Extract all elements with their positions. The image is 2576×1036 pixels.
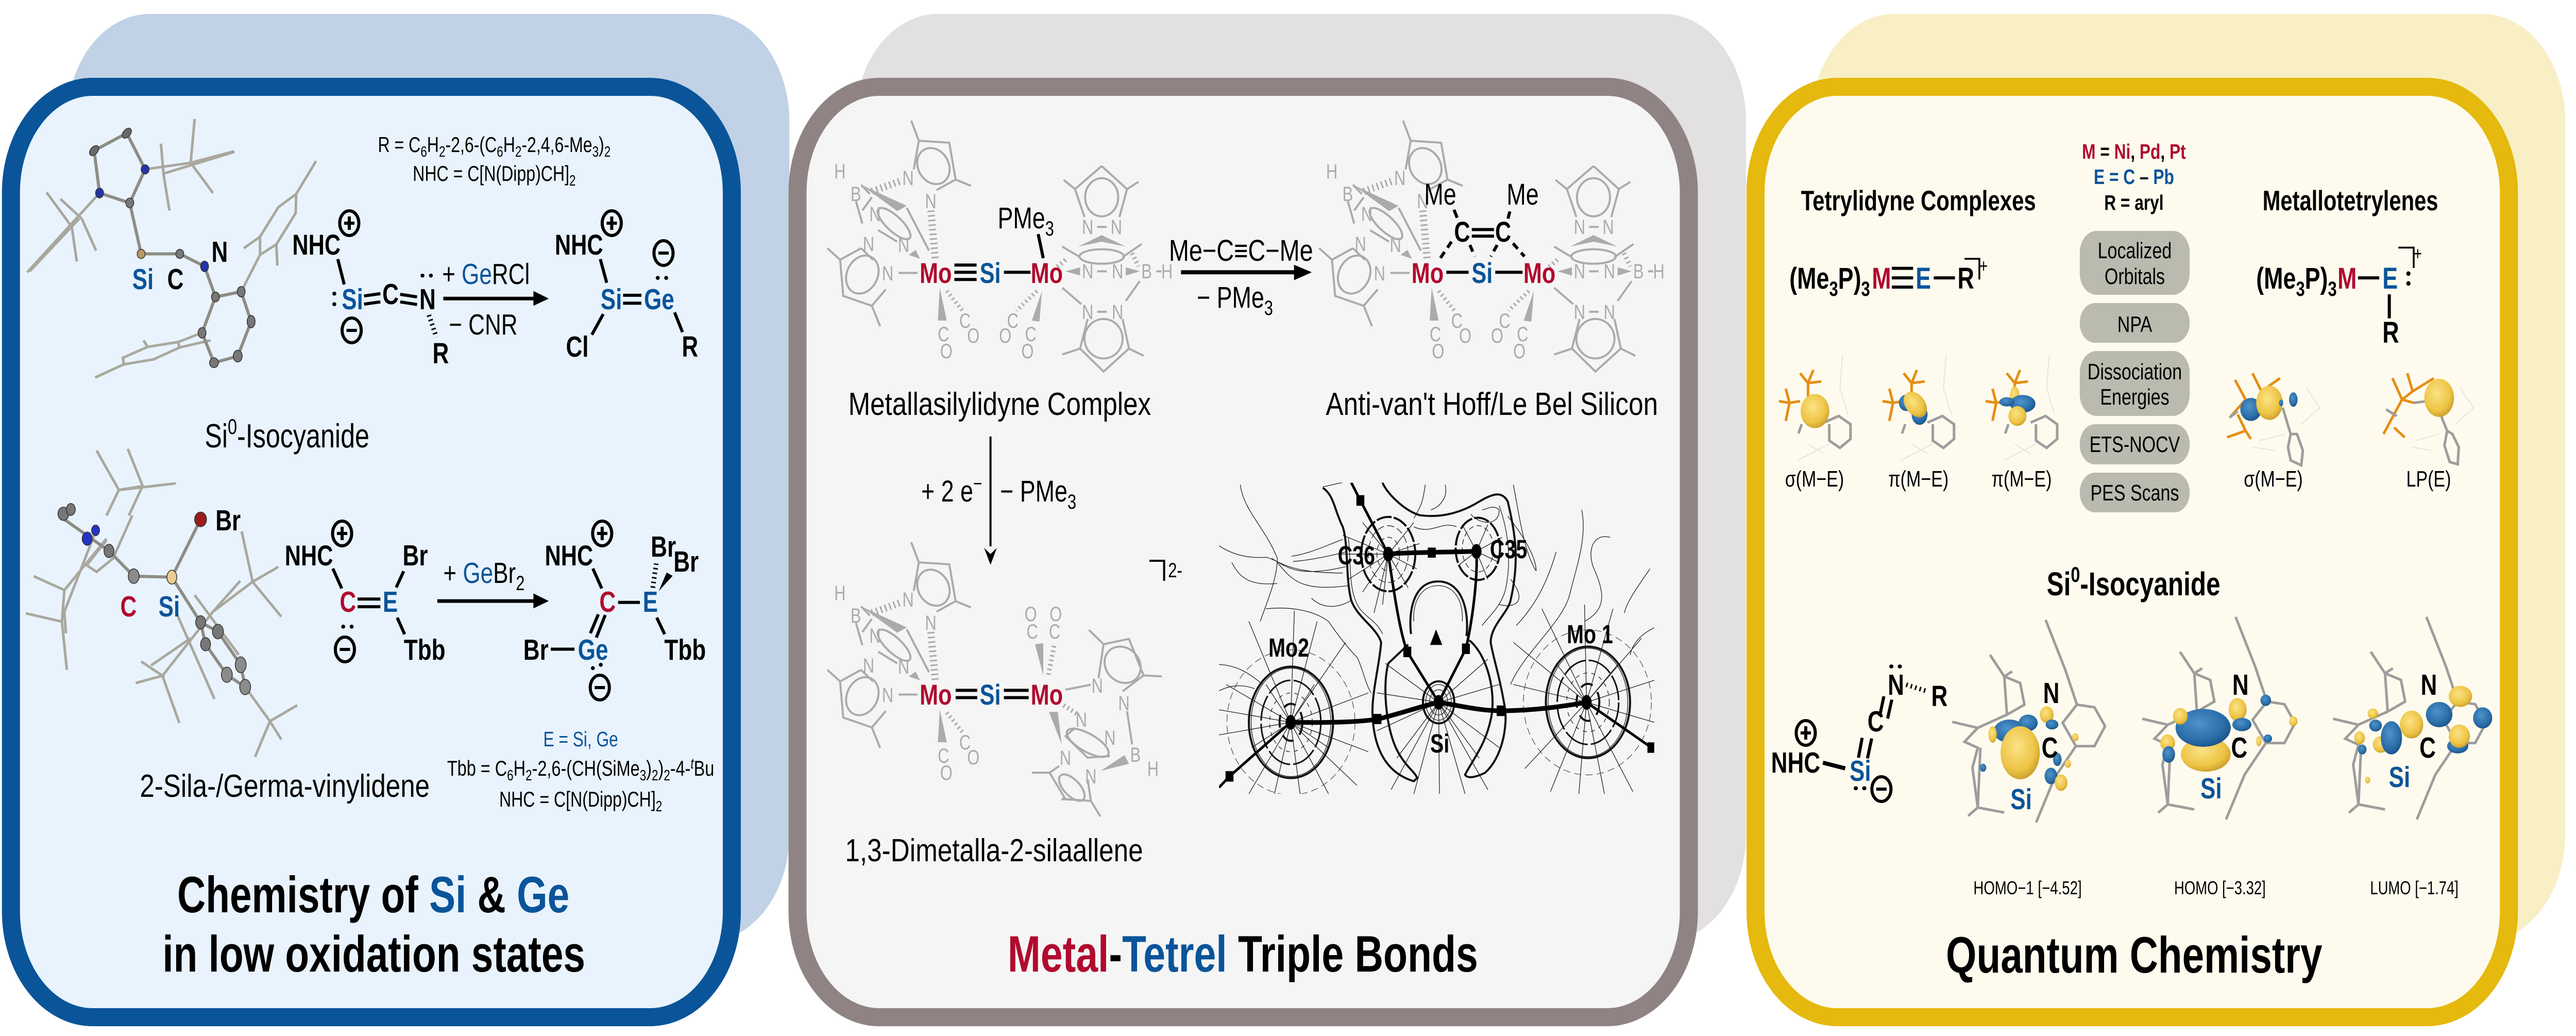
complex: metallasilylidyne: N <box>902 166 914 190</box>
complex: metallasilylidyne: O <box>1021 340 1033 363</box>
pill: dissociation energies <box>2080 351 2190 416</box>
pill: PES scans <box>2080 473 2190 512</box>
reaction: vinylidene with GeBr2: Br <box>523 633 549 666</box>
orbital: sigma M-E metallotetrylene: σ(M−E) <box>2244 466 2303 492</box>
orbital: LUMO <box>2333 617 2492 898</box>
orbital: sigma M-E tetrylidyne: σ(M−E) <box>1785 466 1844 492</box>
formula legend: E, Tbb, NHC: 2 <box>652 767 658 784</box>
complex: anti-van't Hoff/Le Bel silicon: H <box>1326 160 1337 183</box>
complex: metallasilylidyne: PMe <box>997 201 1045 235</box>
complex: 1,3-dimetalla-2-silaallene: Si <box>980 679 1001 711</box>
reaction: isocyanide with GeRCl: NHC <box>292 229 341 261</box>
crystal structure: vinylidene: C <box>120 590 137 623</box>
caption: Si0-Isocyanide: -Isocyanide <box>237 417 369 455</box>
formula: Si0-isocyanide Lewis structure: C <box>1868 705 1884 738</box>
reaction: vinylidene with GeBr2: Br <box>673 545 699 578</box>
reaction arrow: Me-C≡C-Me and minus PMe3: 3 <box>1264 296 1273 320</box>
formula: tetrylidyne complex: + <box>1979 256 1988 276</box>
formula: metallotetrylene <box>2256 243 2422 349</box>
legend: M E R definitions <box>2082 140 2186 214</box>
complex: anti-van't Hoff/Le Bel silicon: Me <box>1424 177 1456 211</box>
reaction: vinylidene with GeBr2: NHC <box>285 540 333 572</box>
complex: anti-van't Hoff/Le Bel silicon: O <box>1432 340 1444 363</box>
orbital: HOMO: N <box>2232 669 2249 701</box>
complex: metallasilylidyne: Mo <box>1031 257 1063 289</box>
formula: metallotetrylene: + <box>2414 243 2422 264</box>
methods list pills <box>2080 231 2190 512</box>
pill: NPA <box>2080 303 2190 343</box>
complex: metallasilylidyne: N <box>1082 260 1093 283</box>
complex: metallasilylidyne: N <box>898 233 909 257</box>
orbital: pi M-E tetrylidyne two <box>1986 355 2057 492</box>
reaction: isocyanide with GeRCl <box>292 211 698 370</box>
complex: anti-van't Hoff/Le Bel silicon: N <box>1417 190 1428 213</box>
complex: metallasilylidyne: N <box>1112 300 1123 324</box>
complex: anti-van't Hoff/Le Bel silicon: N <box>1355 232 1366 256</box>
complex: 1,3-dimetalla-2-silaallene: H <box>834 581 846 605</box>
caption: Si0-Isocyanide: Si <box>205 417 228 455</box>
orbital: HOMO-1: C <box>2042 731 2058 764</box>
complex: anti-van't Hoff/Le Bel silicon: C <box>1454 216 1470 248</box>
complex: 1,3-dimetalla-2-silaallene: Mo <box>920 679 952 711</box>
complex: 1,3-dimetalla-2-silaallene: N <box>898 655 909 678</box>
formula legend: E, Tbb, NHC: E = Si, Ge <box>543 727 618 751</box>
formula: Si0-isocyanide Lewis structure: R <box>1931 680 1947 712</box>
pill: ETS-NOCV: ETS-NOCV <box>2090 432 2180 457</box>
formula legend: E, Tbb, NHC: 2 <box>656 798 662 815</box>
complex: 1,3-dimetalla-2-silaallene: N <box>1076 708 1087 731</box>
complex: 1,3-dimetalla-2-silaallene: O <box>940 761 953 784</box>
complex: anti-van't Hoff/Le Bel silicon <box>1319 121 1665 372</box>
complex: anti-van't Hoff/Le Bel silicon: N <box>1602 215 1614 239</box>
formula legend: E, Tbb, NHC: 2 <box>664 767 670 784</box>
heading: Si0-Isocyanide: Si <box>2047 566 2071 603</box>
reaction arrow: plus 2 e minus PMe3: 3 <box>1067 490 1076 513</box>
caption: 2-Sila-/Germa-vinylidene: 2-Sila-/Germa-vinylidene <box>140 768 430 804</box>
heading: chemistry of Si and Ge: in low oxidation states <box>162 925 585 982</box>
orbital: pi M-E tetrylidyne one: π(M−E) <box>1888 466 1948 492</box>
reaction: isocyanide with GeRCl: Cl <box>566 330 589 363</box>
reaction: isocyanide with GeRCl: C <box>382 278 399 310</box>
complex: metallasilylidyne: C <box>938 323 949 346</box>
complex: 1,3-dimetalla-2-silaallene: O <box>967 746 979 769</box>
reaction: vinylidene with GeBr2: Tbb <box>664 633 706 666</box>
formula: metallotetrylene: 3 <box>2328 277 2337 300</box>
heading: metal-tetrel triple bonds: Metal-Tetrel Triple Bonds <box>1008 925 1478 982</box>
complex: 1,3-dimetalla-2-silaallene: C <box>1027 620 1038 643</box>
reaction: vinylidene with GeBr2: + GeBr <box>443 557 516 589</box>
formula legend: E, Tbb, NHC: ) <box>646 756 652 780</box>
formula legend: E, Tbb, NHC: Bu <box>694 756 714 780</box>
complex: 1,3-dimetalla-2-silaallene: N <box>1104 726 1116 749</box>
orbital: pi M-E tetrylidyne two: π(M−E) <box>1991 466 2052 492</box>
formula legend: E, Tbb, NHC: Tbb = C <box>447 756 507 780</box>
complex: 1,3-dimetalla-2-silaallene: Mo <box>1031 679 1063 711</box>
formula legend: R and NHC <box>378 132 611 189</box>
complex: anti-van't Hoff/Le Bel silicon: N <box>1374 262 1385 285</box>
formula: metallotetrylene: 3 <box>2296 277 2305 300</box>
orbital: HOMO-1: N <box>2043 677 2060 709</box>
orbital: HOMO: Si <box>2200 772 2222 805</box>
formula legend: R and NHC: H <box>503 132 515 157</box>
formula: tetrylidyne complex: 3 <box>1861 277 1870 300</box>
complex: anti-van't Hoff/Le Bel silicon: H <box>1653 260 1665 283</box>
formula legend: R and NHC: R = C <box>378 132 420 157</box>
chart: laplacian contour map with bond paths: Mo 1 <box>1567 620 1613 649</box>
chart: laplacian contour map with bond paths: C36 <box>1338 541 1375 570</box>
pill: dissociation energies: Dissociation <box>2088 359 2182 385</box>
heading: Si0-Isocyanide: -Isocyanide <box>2080 566 2221 603</box>
complex: metallasilylidyne: N <box>1111 215 1122 239</box>
formula legend: E, Tbb, NHC: -4- <box>670 756 690 780</box>
caption: Si0-Isocyanide: 0 <box>228 414 237 439</box>
complex: anti-van't Hoff/Le Bel silicon: Mo <box>1412 257 1444 289</box>
formula legend: R and NHC: 2 <box>604 144 611 160</box>
heading: Si0-Isocyanide: 0 <box>2071 562 2080 587</box>
reaction arrow: plus 2 e minus PMe3 <box>921 437 1076 565</box>
formula legend: E, Tbb, NHC: ) <box>658 756 664 780</box>
complex: anti-van't Hoff/Le Bel silicon: O <box>1513 340 1526 363</box>
formula: Si0-isocyanide Lewis structure <box>1771 664 1947 801</box>
formula legend: E, Tbb, NHC: t <box>690 756 694 772</box>
crystal structure: vinylidene <box>26 449 297 757</box>
crystal structure: Si0-isocyanide <box>27 119 316 377</box>
caption: Anti-van't Hoff/Le Bel Silicon: Anti-van't Hoff/Le Bel Silicon <box>1326 386 1658 422</box>
complex: metallasilylidyne <box>827 121 1173 372</box>
reaction arrow: Me-C≡C-Me and minus PMe3: Me−C≡C−Me <box>1169 233 1313 267</box>
orbital: HOMO-1 <box>1952 620 2105 898</box>
formula: metallotetrylene: P) <box>2305 261 2328 295</box>
formula: Si0-isocyanide Lewis structure: Si <box>1850 755 1871 787</box>
orbital: LUMO: C <box>2419 731 2436 764</box>
complex: metallasilylidyne: N <box>1112 260 1123 283</box>
pill: localized orbitals <box>2080 231 2190 295</box>
complex: anti-van't Hoff/Le Bel silicon: N <box>1574 300 1585 324</box>
complex: anti-van't Hoff/Le Bel silicon: N <box>1574 260 1585 283</box>
complex: 1,3-dimetalla-2-silaallene: C <box>938 744 949 767</box>
heading: Tetrylidyne Complexes: Tetrylidyne Complexes <box>1801 186 2036 216</box>
pill: NPA: NPA <box>2117 312 2153 337</box>
complex: 1,3-dimetalla-2-silaallene: N <box>902 588 914 611</box>
complex: 1,3-dimetalla-2-silaallene: C <box>1049 620 1060 643</box>
formula legend: R and NHC: 3 <box>592 144 599 160</box>
complex: metallasilylidyne: C <box>959 309 971 332</box>
complex: 1,3-dimetalla-2-silaallene: B <box>1130 743 1141 766</box>
complex: anti-van't Hoff/Le Bel silicon: C <box>1451 309 1463 332</box>
complex: anti-van't Hoff/Le Bel silicon: N <box>1394 166 1405 190</box>
complex: 1,3-dimetalla-2-silaallene: O <box>1049 603 1062 626</box>
complex: 1,3-dimetalla-2-silaallene: N <box>1092 674 1103 697</box>
formula legend: E, Tbb, NHC: 2 <box>526 767 532 784</box>
pill: localized orbitals: Localized <box>2098 238 2172 263</box>
pill: localized orbitals: Orbitals <box>2105 264 2165 289</box>
caption: 1,3-Dimetalla-2-silaallene: 1,3-Dimetalla-2-silaallene <box>845 832 1143 868</box>
reaction: vinylidene with GeBr2: Ge <box>578 633 608 666</box>
orbital: sigma M-E metallotetrylene <box>2227 373 2320 492</box>
complex: 1,3-dimetalla-2-silaallene: O <box>1025 603 1037 626</box>
heading: quantum chemistry: Quantum Chemistry <box>1946 926 2323 983</box>
reaction: vinylidene with GeBr2: E <box>383 586 398 618</box>
formula: tetrylidyne complex: M <box>1872 261 1891 295</box>
crystal structure: Si0-isocyanide: C <box>167 263 184 295</box>
orbital: lone pair metallotetrylene: LP(E) <box>2406 466 2451 492</box>
chart: laplacian contour map with bond paths: Mo2 <box>1268 633 1309 662</box>
panel: back card grey <box>855 14 1746 942</box>
formula legend: E, Tbb, NHC: 3 <box>640 767 646 784</box>
complex: metallasilylidyne: O <box>999 324 1011 347</box>
reaction: vinylidene with GeBr2: Tbb <box>404 633 446 666</box>
orbital: pi M-E tetrylidyne one <box>1883 355 1954 492</box>
complex: metallasilylidyne: N <box>1082 300 1093 324</box>
reaction: vinylidene with GeBr2: NHC <box>545 540 593 572</box>
complex: metallasilylidyne: Si <box>980 257 1001 289</box>
formula legend: R and NHC: 2 <box>439 144 445 160</box>
complex: metallasilylidyne: 3 <box>1045 217 1054 240</box>
complex: anti-van't Hoff/Le Bel silicon: N <box>1604 300 1615 324</box>
complex: metallasilylidyne: N <box>869 203 881 226</box>
crystal structure: vinylidene: Br <box>215 504 241 537</box>
formula: Si0-isocyanide Lewis structure: NHC <box>1771 746 1820 779</box>
reaction: vinylidene with GeBr2: C <box>599 586 616 618</box>
reaction: isocyanide with GeRCl: R <box>433 337 449 370</box>
complex: anti-van't Hoff/Le Bel silicon: N <box>1604 260 1615 283</box>
complex: metallasilylidyne: N <box>882 262 893 285</box>
formula: tetrylidyne complex: R <box>1957 261 1974 295</box>
orbital: LUMO: N <box>2421 669 2437 701</box>
panel: back card yellow <box>1811 14 2565 942</box>
caption: Metallasilylidyne Complex: Metallasilylidyne Complex <box>849 386 1151 422</box>
formula legend: R and NHC: 6 <box>420 144 427 160</box>
complex: anti-van't Hoff/Le Bel silicon: O <box>1459 324 1471 347</box>
pill: dissociation energies: Energies <box>2100 385 2170 410</box>
orbital: sigma M-E tetrylidyne <box>1779 355 1851 492</box>
formula legend: R and NHC: ) <box>599 132 604 157</box>
orbital: HOMO-1: HOMO−1 [−4.52] <box>1973 878 2082 898</box>
formula legend: E, Tbb, NHC: NHC = C[N(Dipp)CH] <box>499 787 656 811</box>
complex: 1,3-dimetalla-2-silaallene: N <box>1085 765 1097 788</box>
reaction arrow: plus 2 e minus PMe3: + 2 e <box>921 474 973 508</box>
reaction: isocyanide with GeRCl: NHC <box>555 229 603 261</box>
orbital: HOMO-1: Si <box>2010 783 2032 815</box>
reaction: isocyanide with GeRCl: Si <box>601 283 622 315</box>
complex: anti-van't Hoff/Le Bel silicon: N <box>1390 233 1401 257</box>
complex: anti-van't Hoff/Le Bel silicon: C <box>1517 323 1528 346</box>
reaction arrow: Me-C≡C-Me and minus PMe3 <box>1169 233 1313 320</box>
panel: metal-tetrel triple bonds <box>798 87 1689 1017</box>
legend: M E R definitions: R = aryl <box>2104 191 2164 214</box>
formula legend: E, Tbb, NHC: H <box>514 756 526 780</box>
reaction: vinylidene with GeBr2: E <box>643 586 658 618</box>
complex: 1,3-dimetalla-2-silaallene: B <box>851 604 861 627</box>
chart: laplacian contour map with bond paths: C35 <box>1490 534 1527 564</box>
complex: 1,3-dimetalla-2-silaallene: H <box>1147 757 1159 780</box>
complex: 1,3-dimetalla-2-silaallene: N <box>863 654 874 677</box>
formula legend: R and NHC: 2 <box>515 144 521 160</box>
formula: Si0-isocyanide Lewis structure: N <box>1888 669 1904 701</box>
chart: laplacian contour map with bond paths <box>1219 482 1655 795</box>
legend: M E R definitions: E = C – Pb <box>2094 165 2174 189</box>
reaction: isocyanide with GeRCl: R <box>682 330 698 363</box>
formula: metallotetrylene: R <box>2382 315 2399 349</box>
complex: anti-van't Hoff/Le Bel silicon: N <box>1361 203 1372 226</box>
complex: metallasilylidyne: H <box>1161 260 1173 283</box>
orbital: LUMO: Si <box>2389 761 2410 793</box>
formula: metallotetrylene: (Me <box>2256 261 2296 295</box>
reaction: isocyanide with GeRCl: Ge <box>644 283 674 315</box>
panel: back card blue <box>67 14 789 942</box>
crystal structure: vinylidene: Si <box>159 590 180 623</box>
complex: metallasilylidyne: H <box>834 160 846 183</box>
complex: anti-van't Hoff/Le Bel silicon: Me <box>1506 177 1539 211</box>
orbital: lone pair metallotetrylene <box>2383 373 2473 492</box>
complex: metallasilylidyne: Mo <box>920 257 952 289</box>
pill: ETS-NOCV <box>2080 424 2190 464</box>
complex: anti-van't Hoff/Le Bel silicon: B <box>1633 260 1644 283</box>
orbital: HOMO <box>2142 617 2298 898</box>
complex: anti-van't Hoff/Le Bel silicon: C <box>1495 216 1511 248</box>
complex: metallasilylidyne: O <box>940 340 953 363</box>
reaction: vinylidene with GeBr2: C <box>340 586 356 618</box>
complex: metallasilylidyne: O <box>967 324 979 347</box>
reaction: isocyanide with GeRCl: + GeRCl <box>442 258 530 290</box>
complex: anti-van't Hoff/Le Bel silicon: B <box>1343 182 1353 206</box>
panel: chemistry of Si and Ge <box>11 87 732 1017</box>
formula: metallotetrylene: M <box>2337 261 2357 295</box>
crystal structure: Si0-isocyanide: Si <box>132 263 154 295</box>
heading: chemistry of Si and Ge <box>162 866 585 982</box>
formula: tetrylidyne complex: E <box>1916 261 1931 295</box>
reaction arrow: Me-C≡C-Me and minus PMe3: − PMe <box>1197 280 1264 314</box>
reaction: vinylidene with GeBr2: Br <box>651 530 676 563</box>
panel: quantum chemistry <box>1756 87 2509 1017</box>
formula legend: E, Tbb, NHC: 6 <box>507 767 514 784</box>
formula: tetrylidyne complex: P) <box>1838 261 1861 295</box>
orbital: LUMO: LUMO [−1.74] <box>2370 878 2459 898</box>
crystal structure: Si0-isocyanide: N <box>211 236 228 268</box>
complex: 1,3-dimetalla-2-silaallene: N <box>1118 692 1130 715</box>
complex: anti-van't Hoff/Le Bel silicon: O <box>1491 324 1503 347</box>
complex: metallasilylidyne: N <box>925 190 937 213</box>
heading: chemistry of Si and Ge: Chemistry of Si & Ge <box>177 866 569 923</box>
pill: PES scans: PES Scans <box>2090 480 2179 506</box>
formula legend: R and NHC: H <box>427 132 439 157</box>
formula legend: R and NHC: 6 <box>497 144 503 160</box>
formula: metallotetrylene: E <box>2382 261 2398 295</box>
formula legend: E, Tbb, NHC <box>447 727 714 815</box>
formula legend: E, Tbb, NHC: -2,6-(CH(SiMe <box>532 756 640 780</box>
complex: metallasilylidyne: N <box>1082 215 1093 239</box>
formula legend: R and NHC: -2,6-(C <box>445 132 497 157</box>
complex: 1,3-dimetalla-2-silaallene: C <box>959 731 971 754</box>
formula: tetrylidyne complex <box>1789 256 1988 300</box>
formula legend: R and NHC: -2,4,6-Me <box>521 132 592 157</box>
complex: metallasilylidyne: B <box>851 182 861 206</box>
reaction: vinylidene with GeBr2: 2 <box>516 572 524 595</box>
formula legend: R and NHC: 2 <box>569 173 575 189</box>
legend: M E R definitions: M = Ni, Pd, Pt <box>2082 140 2186 163</box>
formula: tetrylidyne complex: 3 <box>1829 277 1838 300</box>
complex: metallasilylidyne: B <box>1141 260 1152 283</box>
reaction: isocyanide with GeRCl: N <box>419 283 436 315</box>
complex: anti-van't Hoff/Le Bel silicon: Si <box>1471 257 1493 289</box>
complex: 1,3-dimetalla-2-silaallene: N <box>869 624 881 647</box>
chart: laplacian contour map with bond paths: Si <box>1430 729 1449 758</box>
reaction arrow: plus 2 e minus PMe3: − PMe <box>1000 474 1067 508</box>
complex: 1,3-dimetalla-2-silaallene: N <box>925 611 937 634</box>
reaction: isocyanide with GeRCl: Si <box>342 283 363 315</box>
reaction: vinylidene with GeBr2: Br <box>403 539 428 572</box>
complex: metallasilylidyne: C <box>1007 309 1019 332</box>
orbital: HOMO: C <box>2231 731 2247 764</box>
complex: anti-van't Hoff/Le Bel silicon: C <box>1499 309 1511 332</box>
reaction: isocyanide with GeRCl: − CNR <box>449 308 518 341</box>
complex: anti-van't Hoff/Le Bel silicon: C <box>1430 323 1441 346</box>
heading: Metallotetrylenes: Metallotetrylenes <box>2263 186 2438 216</box>
complex: anti-van't Hoff/Le Bel silicon: Mo <box>1523 257 1555 289</box>
orbital: HOMO: HOMO [−3.32] <box>2174 878 2266 898</box>
complex: anti-van't Hoff/Le Bel silicon: N <box>1574 215 1585 239</box>
complex: 1,3-dimetalla-2-silaallene <box>827 542 1182 816</box>
formula legend: R and NHC: NHC = C[N(Dipp)CH] <box>413 161 569 186</box>
complex: 1,3-dimetalla-2-silaallene: N <box>882 683 893 707</box>
complex: 1,3-dimetalla-2-silaallene: N <box>1060 746 1071 770</box>
reaction arrow: plus 2 e minus PMe3: − <box>973 473 982 495</box>
complex: metallasilylidyne: N <box>863 232 874 256</box>
complex: 1,3-dimetalla-2-silaallene: 2- <box>1168 559 1182 582</box>
complex: metallasilylidyne: C <box>1025 323 1037 346</box>
reaction: vinylidene with GeBr2 <box>285 521 706 700</box>
formula: tetrylidyne complex: (Me <box>1789 261 1829 295</box>
